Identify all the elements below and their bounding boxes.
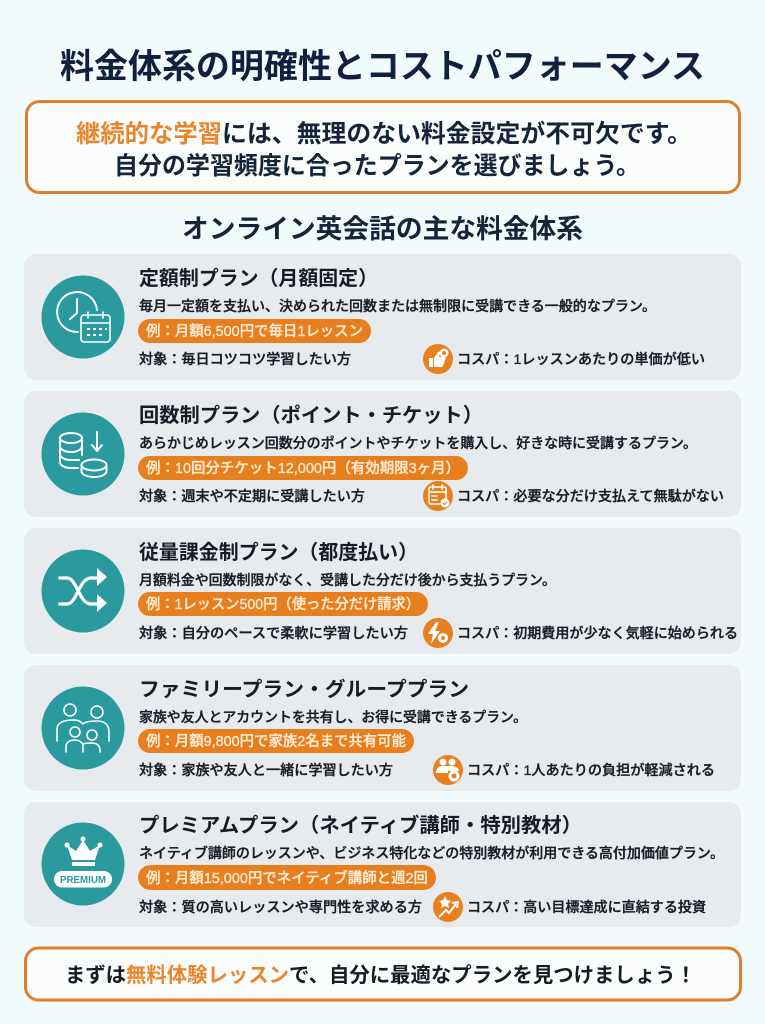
description: あらかじめレッスン回数分のポイントやチケットを購入し、好きな時に受講するプラン。 [139, 435, 697, 451]
example pill: 例：1レッスン500円（使った分だけ請求） [146, 596, 420, 613]
icon: family [42, 686, 124, 770]
icon: thumbs up with coin [423, 344, 453, 374]
heading: プレミアムプラン（ネイティブ講師・特別教材） [139, 813, 582, 837]
example pill [138, 456, 468, 480]
target audience: 対象：週末や不定期に受講したい方 [139, 488, 365, 504]
description: 家族や友人とアカウントを共有し、お得に受講できるプラン。 [139, 709, 527, 725]
example pill: 例：月額15,000円でネイティブ講師と週2回 [146, 869, 428, 887]
example pill [138, 865, 436, 890]
example pill [138, 592, 428, 616]
cost performance: コスパ：高い目標達成に直結する投資 [467, 899, 706, 915]
target audience: 対象：家族や友人と一緒に学習したい方 [139, 762, 393, 778]
callout: intro message: 継続的な学習 [76, 120, 222, 148]
callout: intro message [26, 102, 740, 192]
cost performance: コスパ：必要な分だけ支払えて無駄がない [457, 488, 724, 504]
icon: lightning and coin [423, 618, 453, 648]
description: ネイティブ講師のレッスンや、ビジネス特化などの特別教材が利用できる高付加価値プラン。 [139, 845, 724, 861]
callout: intro message: には、無理のない料金設定が不可欠です。 [222, 119, 692, 148]
panel: 定額制プラン [24, 254, 741, 380]
callout: closing message: まずは [65, 964, 126, 987]
example pill: 例：10回分チケット12,000円（有効期限3ヶ月） [146, 460, 460, 477]
panel: 従量課金制プラン [24, 528, 741, 654]
icon: premium crown [42, 822, 124, 906]
icon: clock and calendar [42, 276, 124, 358]
heading: 回数制プラン（ポイント・チケット） [139, 404, 483, 427]
target audience: 対象：質の高いレッスンや専門性を求める方 [139, 899, 422, 915]
example pill [138, 319, 371, 343]
heading: ファミリープラン・グループプラン [139, 677, 469, 701]
icon: star and rising arrow [433, 892, 463, 922]
cost performance: コスパ：1レッスンあたりの単価が低い [457, 351, 705, 367]
callout: closing message [26, 948, 740, 1000]
icon: calendar with check [423, 481, 453, 511]
panel: ファミリープラン・グループプラン [24, 665, 741, 791]
example pill [138, 729, 414, 753]
icon: people with coin [433, 755, 463, 785]
section heading: オンライン英会話の主な料金体系 [182, 214, 583, 244]
heading: 従量課金制プラン（都度払い） [139, 541, 418, 564]
callout: closing message: 無料体験レッスン [126, 964, 289, 987]
cost performance: コスパ：1人あたりの負担が軽減される [467, 762, 715, 778]
cost performance: コスパ：初期費用が少なく気軽に始められる [457, 625, 738, 641]
icon: coin stacks with down arrow [42, 412, 124, 496]
description: 月額料金や回数制限がなく、受講した分だけ後から支払うプラン。 [139, 572, 556, 588]
panel: 回数制プラン [24, 391, 741, 517]
icon: premium crown: PREMIUM [60, 875, 106, 886]
icon: shuffle arrows [42, 550, 124, 632]
example pill: 例：月額9,800円で家族2名まで共有可能 [146, 733, 406, 750]
example pill: 例：月額6,500円で毎日1レッスン [146, 323, 363, 340]
target audience: 対象：毎日コツコツ学習したい方 [139, 351, 351, 367]
panel: プレミアムプラン [24, 802, 741, 927]
title: 料金体系の明確性とコストパフォーマンス [60, 48, 705, 86]
callout: intro message: 自分の学習頻度に合ったプランを選びましょう。 [114, 152, 640, 180]
description: 毎月一定額を支払い、決められた回数または無制限に受講できる一般的なプラン。 [139, 298, 656, 314]
heading: 定額制プラン（月額固定） [139, 267, 378, 290]
target audience: 対象：自分のペースで柔軟に学習したい方 [139, 625, 408, 641]
callout: closing message: で、自分に最適なプランを見つけましょう！ [289, 964, 696, 987]
